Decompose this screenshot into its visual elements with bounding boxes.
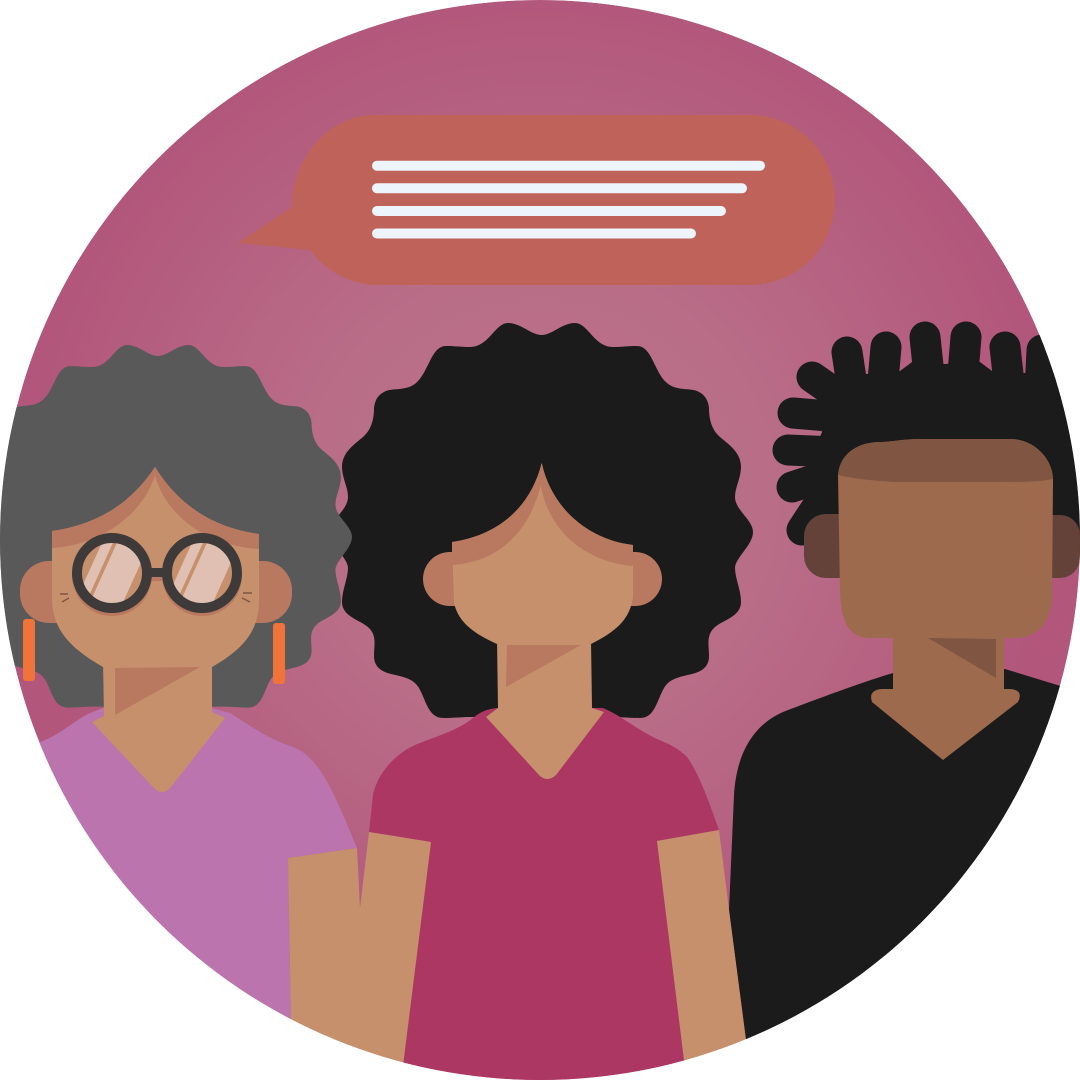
left woman face bbox=[52, 467, 259, 667]
person: middle woman hair bbox=[330, 323, 753, 718]
middle woman forehead shadow bbox=[452, 463, 633, 566]
man hair bbox=[788, 337, 1080, 560]
man neck and collar bbox=[871, 630, 1020, 760]
person: middle woman body bbox=[288, 463, 746, 1080]
speech bubble text lines bbox=[372, 161, 765, 238]
speech bubble bbox=[238, 115, 835, 285]
glasses bbox=[72, 533, 242, 616]
left woman shirt bbox=[39, 708, 357, 1019]
left woman ears bbox=[20, 561, 292, 623]
arms bbox=[288, 830, 746, 1080]
man shirt bbox=[729, 669, 1060, 1040]
middle woman face bbox=[452, 463, 633, 644]
middle woman neck shadow bbox=[506, 645, 581, 687]
left woman neck and collar bbox=[92, 660, 225, 792]
middle woman ears bbox=[423, 552, 662, 606]
left woman neck shadow bbox=[115, 667, 200, 715]
man neck shadow bbox=[928, 638, 996, 678]
man face bbox=[838, 439, 1053, 638]
left woman earrings bbox=[23, 619, 285, 684]
left woman hair bbox=[0, 345, 352, 708]
man ears bbox=[804, 514, 1080, 578]
left woman eye lines bbox=[60, 593, 252, 602]
person: right man bbox=[729, 337, 1080, 1080]
middle woman neck and collar bbox=[486, 640, 604, 779]
person: left woman bbox=[0, 345, 357, 1080]
left woman forehead shadow bbox=[52, 467, 259, 549]
lens highlights bbox=[84, 543, 230, 603]
middle woman shirt bbox=[369, 708, 719, 1080]
man hairline shadow bbox=[838, 439, 1053, 482]
